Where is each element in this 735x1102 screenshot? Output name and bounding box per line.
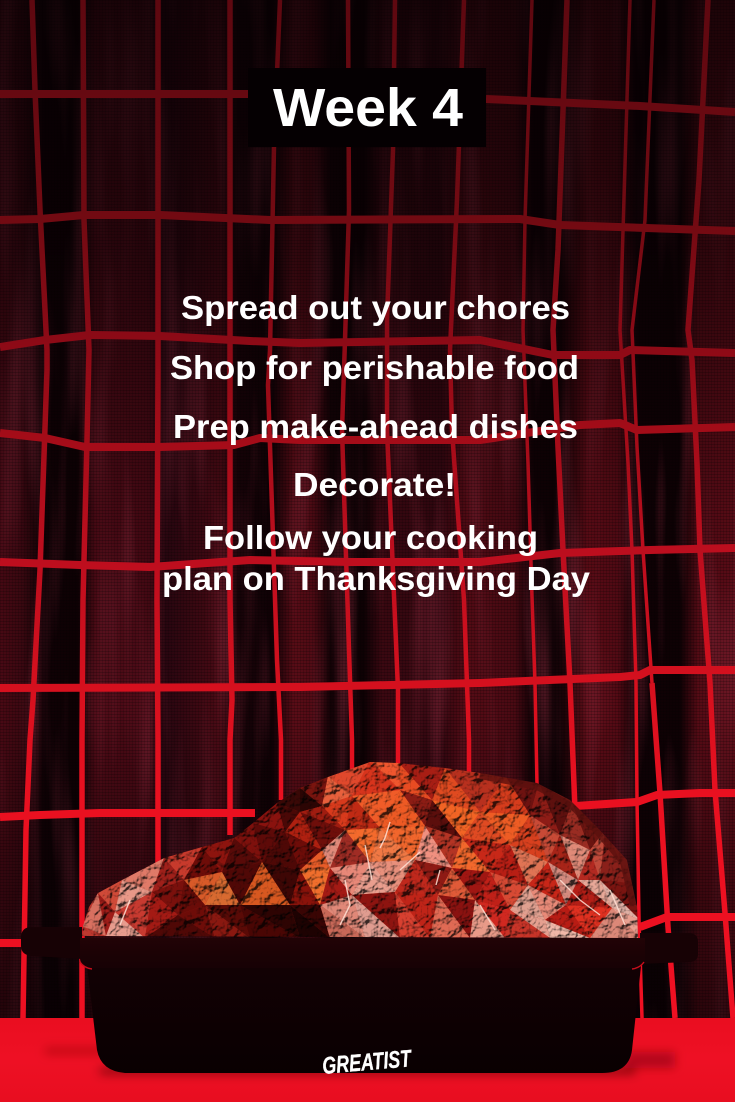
Greatist logo: GREATIST	[321, 1045, 414, 1080]
checklist text: Follow your cooking	[203, 519, 538, 556]
checklist text: plan on Thanksgiving Day	[162, 560, 591, 597]
checklist text: Spread out your chores	[181, 289, 570, 326]
foil highlights	[120, 822, 625, 930]
title: Week 4: Week 4	[273, 78, 463, 138]
title: Week 4	[248, 68, 486, 147]
checklist text: Decorate!	[293, 466, 456, 503]
checklist text: Prep make-ahead dishes	[173, 408, 578, 445]
table	[0, 1018, 735, 1102]
pan shadow on table	[45, 1048, 675, 1074]
pan rim red edge	[80, 962, 644, 969]
pan rim	[80, 938, 645, 968]
pan handles	[21, 927, 698, 964]
checklist text	[162, 289, 591, 597]
foil right dark edge	[480, 775, 634, 905]
roasting pan	[21, 927, 698, 1073]
pan lower body	[87, 966, 641, 1073]
foil-wrapped turkey	[80, 755, 645, 945]
foil crumple texture	[80, 755, 645, 945]
checklist text: Shop for perishable food	[170, 349, 579, 386]
